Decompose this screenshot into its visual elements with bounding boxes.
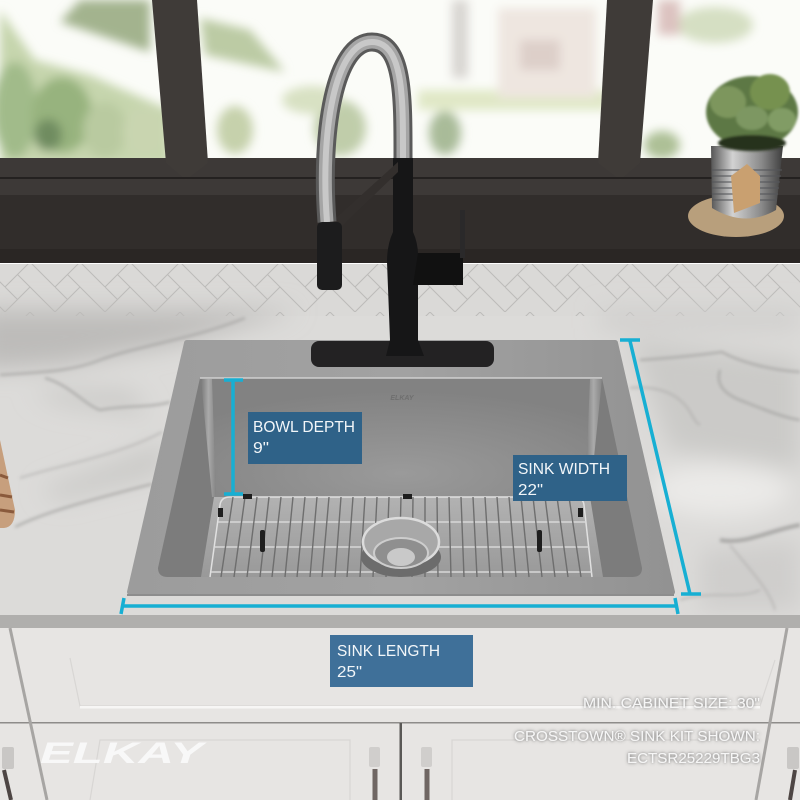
sink flange xyxy=(130,343,672,592)
handle xyxy=(413,253,463,285)
bowl floor xyxy=(201,497,603,577)
cutting board at left edge xyxy=(0,440,15,528)
label: sink width: SINK WIDTH xyxy=(518,461,610,478)
cabinet handles xyxy=(2,747,799,800)
window sill xyxy=(0,195,800,263)
sink bowl xyxy=(158,378,642,577)
label: sink length xyxy=(330,635,473,687)
support arm xyxy=(336,162,398,226)
label: bowl depth: BOWL DEPTH xyxy=(253,419,355,436)
dimension: sink length arrow xyxy=(121,598,678,614)
faucet body xyxy=(386,158,424,356)
deck plate xyxy=(311,341,494,367)
bowl back wall xyxy=(212,379,590,497)
tag xyxy=(731,164,760,213)
foliage xyxy=(706,74,798,151)
can ribs xyxy=(712,170,782,200)
flange front edge xyxy=(127,594,674,596)
brand logo: ELKAY xyxy=(40,737,208,770)
label: bowl depth: 9" xyxy=(253,440,269,457)
cork coaster xyxy=(688,195,784,237)
label: sink length: 25" xyxy=(337,664,362,681)
dimension: bowl depth arrow xyxy=(224,380,243,494)
spray head xyxy=(317,222,342,290)
note: kit shown xyxy=(514,728,760,767)
note: kit shown: CROSSTOWN® SINK KIT SHOWN: xyxy=(514,728,760,745)
faucet xyxy=(311,42,494,367)
rack clips xyxy=(218,494,583,552)
window view background xyxy=(0,0,800,165)
tin can xyxy=(711,146,783,219)
note: kit shown: ECTSR25229TBG3 xyxy=(627,750,760,767)
label: sink width: 22" xyxy=(518,482,543,499)
bowl back corners xyxy=(201,379,216,497)
bottom grid rack xyxy=(210,497,592,577)
flexible hose xyxy=(325,42,403,222)
cabinets xyxy=(0,628,800,800)
tile backsplash xyxy=(0,264,800,317)
window frame xyxy=(0,0,800,196)
logo stamp in bowl: ELKAY xyxy=(390,395,415,402)
drain basket xyxy=(361,518,441,577)
marble countertop xyxy=(0,310,800,615)
dimension: sink width arrow xyxy=(620,340,701,594)
label: sink width xyxy=(513,455,627,501)
note: minimum cabinet size: MIN. CABINET SIZE: 30" xyxy=(583,695,760,712)
countertop front edge xyxy=(0,615,800,629)
label: sink length: SINK LENGTH xyxy=(337,643,440,660)
label: bowl depth xyxy=(248,412,362,464)
plant in tin can xyxy=(688,74,798,237)
